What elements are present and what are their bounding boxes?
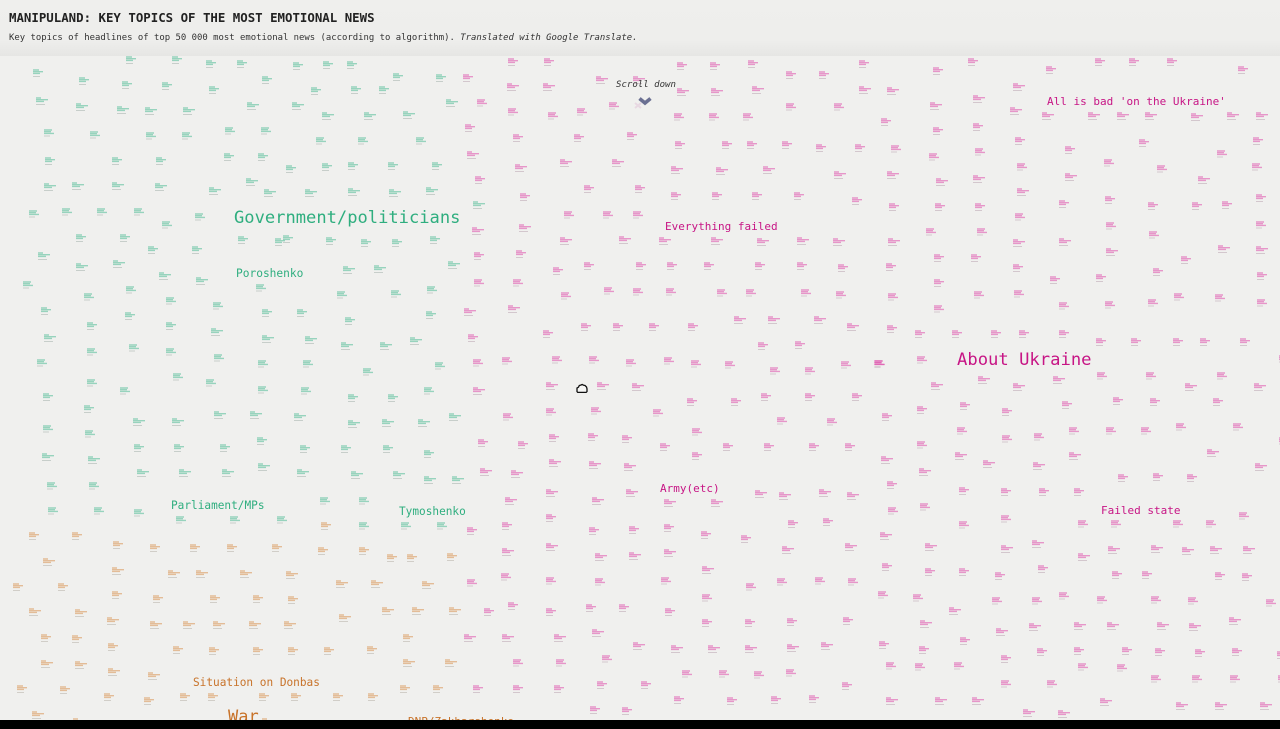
label: Government/politicians: Government/politicians xyxy=(234,208,460,228)
label: Failed state: Failed state xyxy=(1101,504,1180,517)
label: Poroshenko: Poroshenko xyxy=(236,267,303,280)
subtitle: Key topics of headlines of top 50 000 most emotional news (according to algorithm). Translated with Google Translate. xyxy=(9,33,637,43)
header band xyxy=(0,0,1280,56)
title: MANIPULAND: KEY TOPICS OF THE MOST EMOTIONAL NEWS xyxy=(9,10,375,25)
icon: hand cursor xyxy=(577,384,587,392)
label: War: War xyxy=(228,707,259,727)
label: Parliament/MPs: Parliament/MPs xyxy=(171,499,265,512)
label: Everything failed: Everything failed xyxy=(665,220,778,233)
label: DNP/Zakharshenko: DNP/Zakharshenko xyxy=(408,715,514,728)
bottom black bar xyxy=(0,720,1280,729)
label: Army(etc): Army(etc) xyxy=(660,482,720,495)
green cluster field: government and politicians headlines xyxy=(23,56,473,522)
pink cluster field: Ukraine and failure headlines xyxy=(463,58,1279,710)
orange cluster field: war and Donbas headlines xyxy=(13,522,449,718)
icon: scroll down chevron xyxy=(640,98,650,103)
label: Tymoshenko: Tymoshenko xyxy=(399,505,466,518)
faint pink mark under the chevron xyxy=(635,103,641,108)
label: All is bad on the Ukraine: All is bad 'on the Ukraine' xyxy=(1047,95,1226,108)
label: About Ukraine: About Ukraine xyxy=(957,350,1092,370)
scroll hint text: Scroll down xyxy=(616,80,676,90)
label: Situation on Donbas: Situation on Donbas xyxy=(193,676,320,689)
